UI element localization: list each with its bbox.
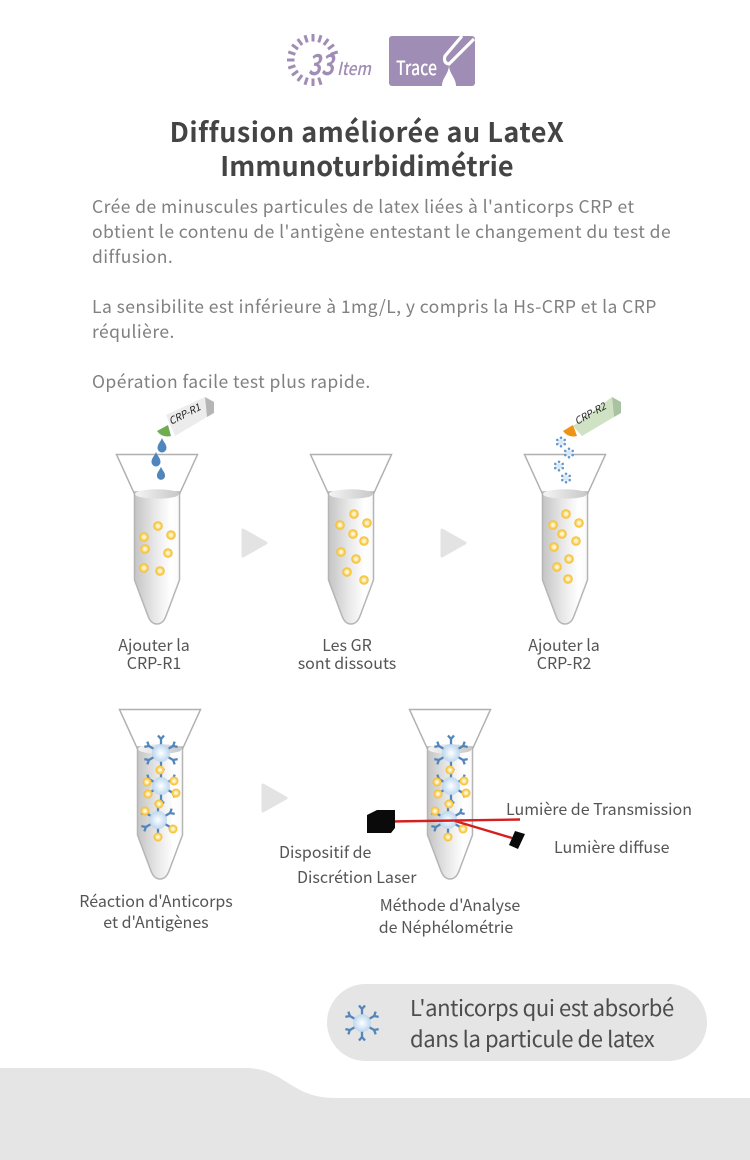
title: Immunoturbidimétrie [220, 145, 514, 184]
text block: description: diffusion. [92, 244, 173, 269]
icon: 33 Item badge [287, 34, 372, 86]
step 3: add CRP-R2 tube [524, 397, 621, 624]
title: Diffusion améliorée au LateX [170, 111, 564, 150]
step 3: add CRP-R2 tube: CRP-R2 [571, 397, 610, 428]
title [170, 111, 564, 184]
text block: description: La sensibilite est inférieure à 1mg/L, y compris la Hs-CRP et la CRP [92, 294, 657, 319]
legend callout [327, 984, 707, 1061]
text block: description: obtient le contenu de l'antigène entestant le changement du test de [92, 219, 671, 244]
icon: 33 Item badge: 33 [308, 42, 336, 84]
label: laser device: Discrétion Laser [297, 864, 417, 888]
icon: latex particle with antibody [345, 1006, 379, 1040]
label: transmission light: Lumière de Transmission [506, 796, 692, 820]
caption: step 4: Réaction d'Anticorps [79, 888, 233, 912]
label: laser device: Dispositif de [279, 839, 372, 863]
step 1: add CRP-R1 tube [116, 397, 214, 624]
caption: step 4: et d'Antigènes [103, 909, 209, 933]
text block: description: Opération facile test plus rapide. [92, 369, 371, 394]
label: diffuse light: Lumière diffuse [554, 834, 670, 858]
arrow 1 [243, 530, 266, 556]
legend callout: dans la particule de latex [410, 1022, 655, 1054]
step 1: add CRP-R1 tube: CRP-R1 [166, 399, 203, 428]
caption: step 3: Ajouter la [528, 632, 600, 656]
step 5: nephelometry tube with laser [367, 710, 525, 879]
caption: step 1: Ajouter la [118, 632, 190, 656]
arrow 3 [263, 785, 286, 811]
laser beams [390, 820, 520, 838]
caption: step 2: sont dissouts [298, 650, 396, 674]
icon: Trace badge: Trace [396, 52, 437, 81]
footer wave [0, 1068, 750, 1160]
legend callout: L'anticorps qui est absorbé [410, 991, 674, 1023]
caption: nephelometry: de Néphélométrie [379, 914, 513, 938]
caption: step 2: Les GR [322, 632, 372, 656]
caption: step 1: CRP-R1 [127, 650, 181, 674]
laser emitter [367, 810, 395, 833]
text block: description: Crée de minuscules particules de latex liées à l'anticorps CRP et [92, 194, 635, 219]
icon: Trace badge [389, 36, 475, 86]
step 2: red cells dissolved tube [310, 454, 392, 624]
caption: step 3: CRP-R2 [537, 650, 591, 674]
arrow 2 [442, 530, 465, 556]
text block: description [92, 194, 671, 394]
caption: nephelometry: Méthode d'Analyse [380, 892, 520, 916]
text block: description: réqulière. [92, 319, 175, 344]
icon: 33 Item badge: Item [337, 55, 372, 81]
detector [509, 831, 525, 849]
step 4: antibody antigen reaction tube [120, 710, 200, 879]
